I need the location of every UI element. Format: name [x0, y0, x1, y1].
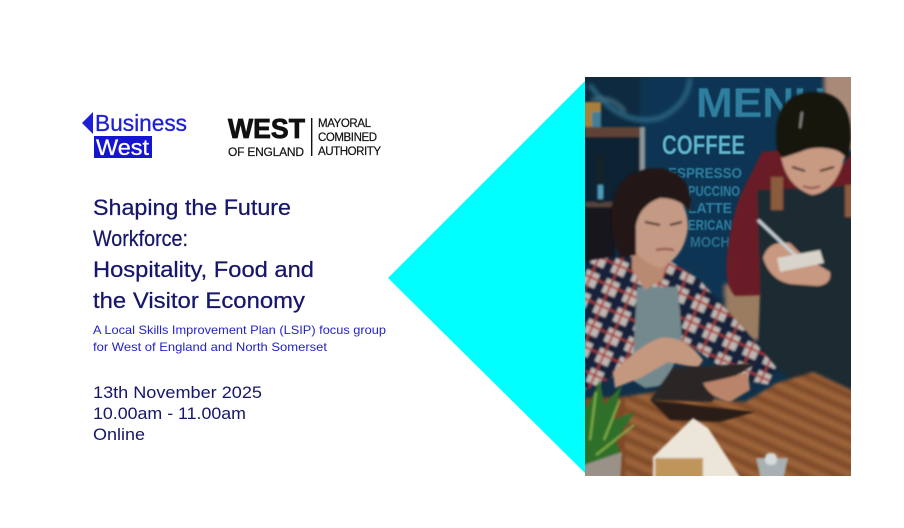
logo text: WEST: WEST	[228, 113, 305, 144]
infographic canvas	[82, 77, 851, 476]
tablet	[650, 363, 757, 422]
chalkboard lettering	[662, 79, 826, 251]
event details: Online	[93, 425, 145, 444]
chalkboard lettering: ERICAN	[688, 217, 732, 234]
chalkboard lettering: PUCCINO	[688, 183, 740, 200]
seated woman in plaid shirt	[578, 168, 777, 392]
title: Hospitality, Food and	[93, 257, 314, 282]
chalkboard lettering: ESPRESSO	[668, 165, 742, 182]
logo text: MAYORAL COMBINED AUTHORITY	[318, 118, 381, 158]
title: Shaping the Future	[93, 195, 291, 220]
wooden table	[585, 370, 851, 476]
icon: left arrow	[82, 112, 93, 134]
event details	[93, 383, 262, 444]
logo box: West: West	[96, 135, 150, 160]
subtitle: for West of England and North Somerset	[93, 340, 328, 354]
logo: West of England Mayoral Combined Authority	[228, 113, 381, 159]
napkin holder and shaker	[653, 418, 788, 485]
subtitle: A Local Skills Improvement Plan (LSIP) focus group	[93, 323, 386, 337]
potted plant	[585, 380, 636, 476]
icon: cyan diamond arrow	[388, 81, 585, 473]
logo: Business West	[82, 110, 187, 160]
title	[93, 195, 314, 313]
logo text: Business: Business	[95, 110, 187, 136]
logo text: MAYORAL COMBINED AUTHORITY: COMBINED	[318, 132, 377, 144]
title: the Visitor Economy	[93, 288, 306, 313]
subtitle	[93, 323, 386, 354]
barista in maroon hoodie	[726, 92, 860, 392]
logo divider	[311, 118, 312, 156]
chalkboard lettering: LATTE	[688, 200, 732, 217]
shelf	[585, 100, 646, 262]
chalkboard background	[578, 70, 860, 340]
chalkboard lettering: COFFEE	[662, 130, 745, 160]
chalkboard lettering: MOCH	[690, 234, 730, 251]
logo text: MAYORAL COMBINED AUTHORITY: AUTHORITY	[318, 146, 381, 158]
chalkboard lettering: MENU	[696, 79, 826, 126]
event details: 10.00am - 11.00am	[93, 404, 246, 423]
photo: cafe staff with tablet and notepad	[578, 70, 860, 485]
title: Workforce:	[93, 226, 188, 251]
logo text: OF ENGLAND: OF ENGLAND	[228, 145, 304, 159]
event details: 13th November 2025	[93, 383, 262, 402]
logo text: MAYORAL COMBINED AUTHORITY: MAYORAL	[318, 118, 372, 130]
